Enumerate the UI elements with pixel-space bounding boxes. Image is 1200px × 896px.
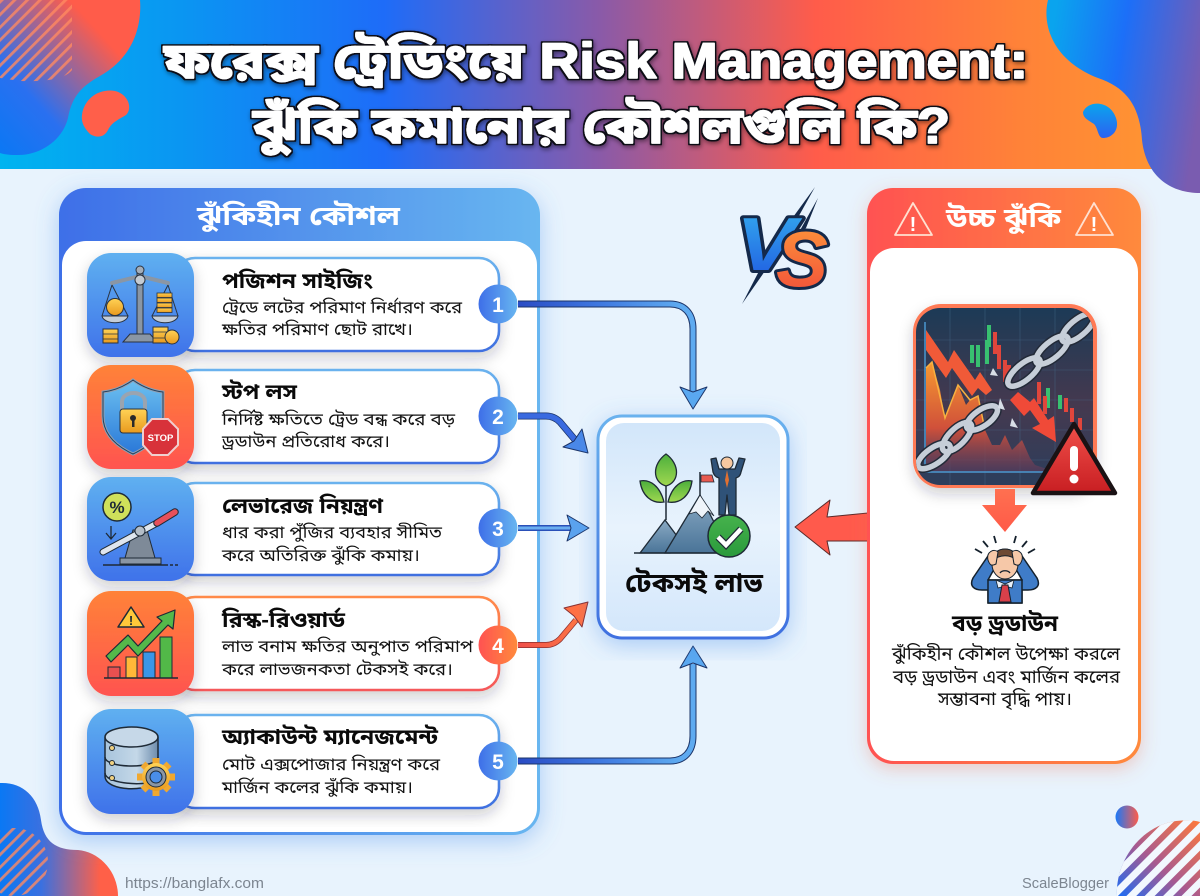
panel: high risk (867, 188, 1141, 764)
arrow from high risk to centre (795, 500, 868, 555)
icon: balance scale with coins (102, 266, 179, 344)
icon: warning triangle (1033, 424, 1115, 493)
bottom-right decorative stripes (1116, 806, 1200, 896)
top-left decorative blob (0, 0, 140, 155)
row 1: position sizing (87, 253, 518, 357)
title: ফরেক্স ট্রেডিংয়ে Risk Management: (163, 31, 1028, 89)
bottom-left decorative blob (0, 783, 118, 896)
text: row 2: ড্রডাউন প্রতিরোধ করে। (221, 431, 390, 451)
arrow 3 to centre (518, 515, 589, 541)
panel heading: ঝুঁকিহীন কৌশল (196, 200, 401, 233)
arrow 2 to centre (518, 416, 588, 453)
arrow 4 to centre (518, 602, 588, 645)
title (163, 31, 1028, 156)
row 2: stop loss (87, 365, 518, 469)
icon: shield lock and stop sign: STOP (148, 433, 174, 444)
icon: plant mountain and winner (634, 454, 750, 557)
header banner (0, 0, 1200, 193)
badge 2: 2 (492, 406, 504, 429)
top-right decorative blob (1046, 0, 1200, 193)
text: row 3: ধার করা পুঁজির ব্যবহার সীমিত (222, 522, 443, 543)
text: big drawdown: বড় ড্রডাউন এবং মার্জিন কলের (892, 666, 1120, 687)
text: big drawdown: ঝুঁকিহীন কৌশল উপেক্ষা করলে (891, 644, 1121, 665)
panel heading: ! (1091, 214, 1097, 236)
arrow 1 to centre (518, 304, 707, 409)
row 3: leverage control (87, 477, 518, 581)
badge 1: 1 (492, 294, 504, 317)
text: row 5: অ্যাকাউন্ট ম্যানেজমেন্ট (221, 725, 438, 749)
badge 4: 4 (492, 635, 504, 658)
arrow 5 to centre (518, 646, 707, 761)
text: row 5 (221, 725, 441, 798)
illustration: market crash with broken chain (913, 304, 1115, 493)
text: row 4 (221, 608, 474, 679)
text: big drawdown (891, 609, 1121, 710)
badge 3: 3 (492, 518, 504, 541)
badge 5 (478, 742, 518, 780)
icon: stressed person (972, 536, 1038, 603)
text: row 4: করে লাভজনকতা টেকসই করে। (221, 659, 453, 679)
badge 2 (478, 396, 518, 436)
text: row 2: স্টপ লস (221, 380, 297, 404)
panel inner surface (62, 241, 537, 832)
icon: growth chart with warning: ! (129, 613, 133, 628)
VS badge: S (776, 215, 828, 303)
badge 3 (478, 508, 518, 548)
text: big drawdown: সম্ভাবনা বৃদ্ধি পায়। (937, 689, 1072, 710)
text: row 3: করে অতিরিক্ত ঝুঁকি কমায়। (221, 545, 420, 566)
panel inner surface (870, 248, 1138, 761)
text: row 3 (221, 494, 443, 566)
arrow down to drawdown (982, 489, 1027, 532)
icon: database and gear (105, 727, 175, 796)
text: big drawdown: বড় ড্রডাউন (951, 609, 1059, 636)
icon: growth chart with warning (104, 607, 178, 678)
text: row 3: লেভারেজ নিয়ন্ত্রণ (222, 494, 383, 518)
panel heading: ! (910, 214, 916, 236)
text: row 2 (221, 380, 456, 451)
VS badge: V (736, 202, 803, 286)
text: row 5: মার্জিন কলের ঝুঁকি কমায়। (221, 776, 413, 798)
text: row 1: পজিশন সাইজিং (222, 269, 374, 293)
text: row 1 (221, 269, 463, 339)
text: row 5: মোট এক্সপোজার নিয়ন্ত্রণ করে (222, 754, 441, 774)
footer brand: ScaleBlogger (1022, 875, 1109, 892)
icon: shield lock and stop sign (103, 380, 178, 455)
panel heading (895, 202, 1113, 236)
row 5: account management (87, 709, 518, 814)
label: sustainable profit: টেকসই লাভ (625, 567, 764, 598)
panel heading: উচ্চ ঝুঁকি (945, 202, 1062, 235)
text: row 2: নির্দিষ্ট ক্ষতিতে ট্রেড বন্ধ করে বড় (221, 408, 456, 429)
VS badge (736, 187, 828, 304)
title: ঝুঁকি কমানোর কৌশলগুলি কি? (252, 96, 950, 156)
panel: sustainable profit (598, 416, 788, 638)
row 4: risk reward (87, 591, 518, 696)
icon: lever and percent (103, 493, 178, 565)
text: row 1: ট্রেডে লটের পরিমাণ নির্ধারণ করে (222, 296, 463, 317)
icon: lever and percent: % (109, 498, 125, 517)
text: row 1: ক্ষতির পরিমাণ ছোট রাখে। (221, 319, 413, 339)
badge 4 (478, 626, 518, 664)
badge 5: 5 (492, 751, 504, 774)
footer url: https://banglafx.com (125, 875, 264, 892)
text: row 4: রিস্ক-রিওয়ার্ড (221, 608, 346, 632)
badge 1 (478, 284, 518, 324)
panel: low-risk strategies (59, 188, 540, 835)
text: row 4: লাভ বনাম ক্ষতির অনুপাত পরিমাপ (221, 636, 474, 657)
